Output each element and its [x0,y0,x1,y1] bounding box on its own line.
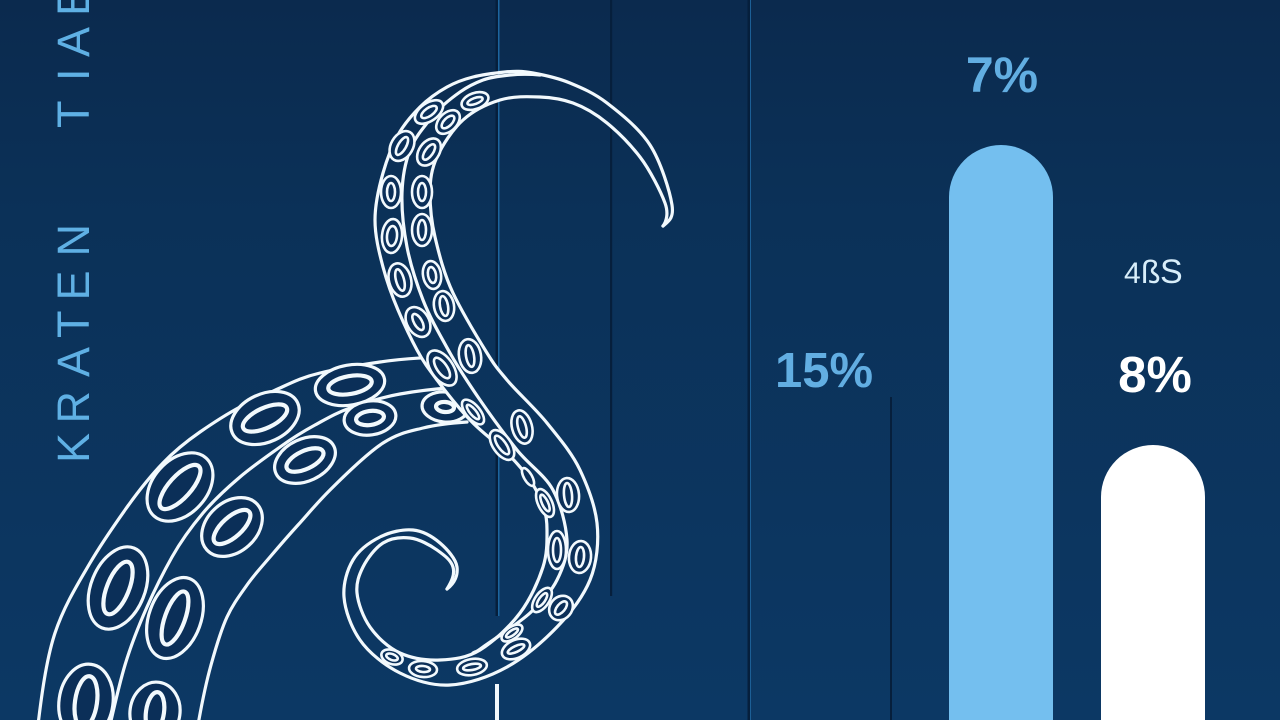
tentacle: S curve [344,71,672,685]
suckers: lower arm [54,359,469,720]
small label above 8%: S [1160,253,1183,291]
bar: white 8% [1101,445,1205,720]
vertical guide lines [495,0,892,720]
small label above 8%: ß [1141,254,1161,290]
value: 15%: 15% [775,344,873,398]
value: 7%: 7% [966,47,1038,103]
vertical title: KRATEN: KRATEN [48,224,99,463]
small label above 8%: 4 [1124,257,1141,290]
value: 8%: 8% [1118,346,1192,403]
tentacle: lower arm [38,358,469,720]
bar: blue 7% [949,145,1053,720]
suckers: S curve [379,89,592,678]
